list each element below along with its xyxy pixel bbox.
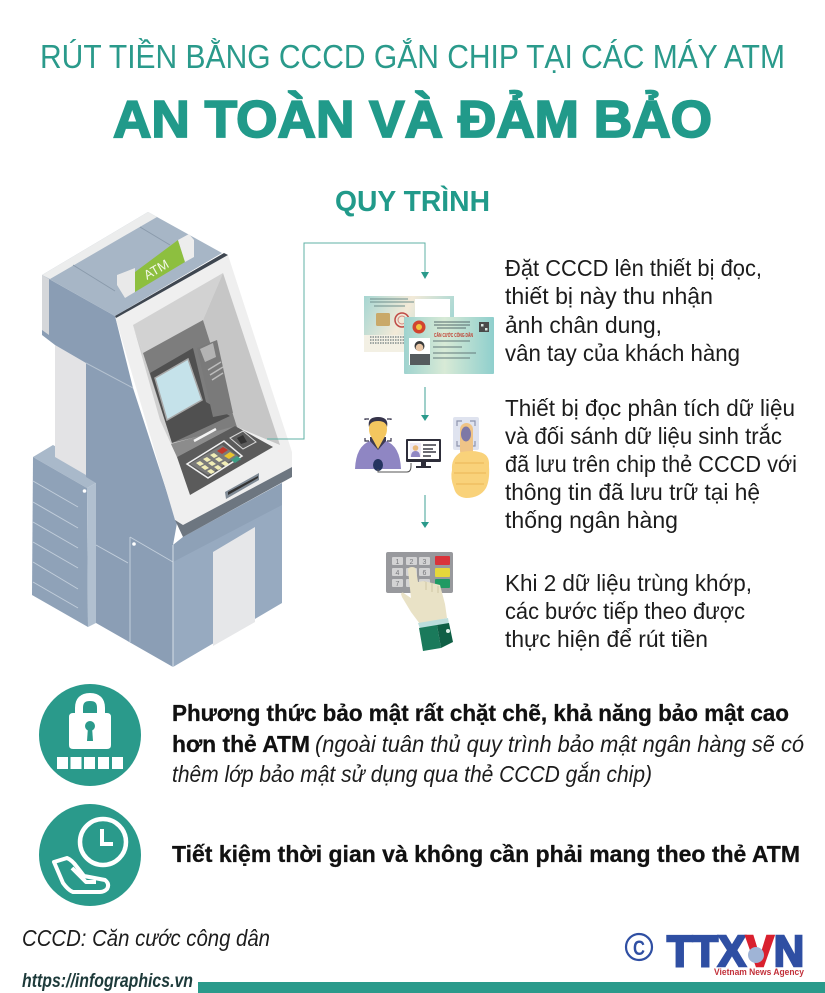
ATM sign <box>117 234 194 298</box>
website url: https://infographics.vn <box>22 971 193 992</box>
icon: CCCD cards: CĂN CƯỚC CÔNG DÂN <box>434 331 473 339</box>
main body front <box>86 363 177 667</box>
logo: TTXVN: Vietnam News Agency <box>714 967 805 978</box>
icon: keypad with hand: 2 <box>410 559 414 566</box>
security text: thêm lớp bảo mật sử dụng qua thẻ CCCD gắn chip) <box>172 761 652 787</box>
arrow 3 <box>421 495 429 528</box>
time saving text: Tiết kiệm thời gian và không cần phải mang theo thẻ ATM <box>172 841 800 867</box>
upper body left face <box>42 275 133 388</box>
base left cabinet <box>32 445 96 627</box>
logo: TTXVN: C <box>633 937 645 960</box>
icon: fingerprint scan <box>451 417 489 498</box>
icon: keypad with hand: 1 <box>396 559 400 566</box>
top surface <box>42 212 222 316</box>
step 2 text: đã lưu trên chip thẻ CCCD với <box>505 451 797 477</box>
step 1 text: vân tay của khách hàng <box>505 340 740 366</box>
heading: quy trình: QUY TRÌNH <box>335 184 490 218</box>
icon: keypad with hand: 9 <box>423 581 427 588</box>
arrow 2 <box>421 387 429 421</box>
icon: keypad with hand: 7 <box>396 581 400 588</box>
step 1 text: ảnh chân dung, <box>505 312 662 338</box>
step 2 text: Thiết bị đọc phân tích dữ liệu <box>505 395 795 421</box>
security text: Phương thức bảo mật rất chặt chẽ, khả năng bảo mật cao <box>172 700 789 726</box>
bottom bar <box>198 982 825 993</box>
light column <box>55 345 86 475</box>
step 2 text <box>505 395 797 533</box>
step 2 text: và đối sánh dữ liệu sinh trắc <box>505 423 782 449</box>
white door panel <box>213 527 255 646</box>
step 3 text: các bước tiếp theo được <box>505 598 745 624</box>
icon: keypad with hand: 3 <box>423 559 427 566</box>
step 1 text: thiết bị này thu nhận <box>505 283 713 309</box>
icon: keypad with hand: 6 <box>423 570 427 577</box>
keypad shelf <box>177 426 273 495</box>
step 3 text: Khi 2 dữ liệu trùng khớp, <box>505 570 752 596</box>
icon: keypad with hand <box>386 552 453 651</box>
connector line with arrow <box>267 243 429 439</box>
step 2 text: thông tin đã lưu trữ tại hệ <box>505 479 760 505</box>
base right face <box>173 483 282 667</box>
front frame <box>115 253 292 537</box>
step 1 text <box>505 255 762 366</box>
ATM screen <box>155 359 202 420</box>
icon: padlock <box>39 684 141 786</box>
icon: clock in hand <box>39 804 141 906</box>
security text <box>172 700 804 787</box>
footnote: CCCD: Căn cước công dân <box>22 925 270 951</box>
security text: (ngoài tuân thủ quy trình bảo mật ngân hàng sẽ có <box>315 731 804 757</box>
logo: TTXVN: TTXVN <box>667 927 804 976</box>
step 1 text: Đặt CCCD lên thiết bị đọc, <box>505 255 762 281</box>
title line 2: AN TOÀN VÀ ĐẢM BẢO <box>113 90 712 149</box>
icon: keypad with hand: 4 <box>396 570 400 577</box>
step 2 text: thống ngân hàng <box>505 507 678 533</box>
ATM sign: ATM <box>141 256 171 283</box>
illustration: ATM machine <box>32 212 292 667</box>
step 3 text <box>505 570 752 652</box>
step 3 text: thực hiện để rút tiền <box>505 626 708 652</box>
security text: hơn thẻ ATM <box>172 731 310 757</box>
icon: CCCD cards <box>364 296 494 374</box>
icon: face recognition <box>355 417 441 472</box>
